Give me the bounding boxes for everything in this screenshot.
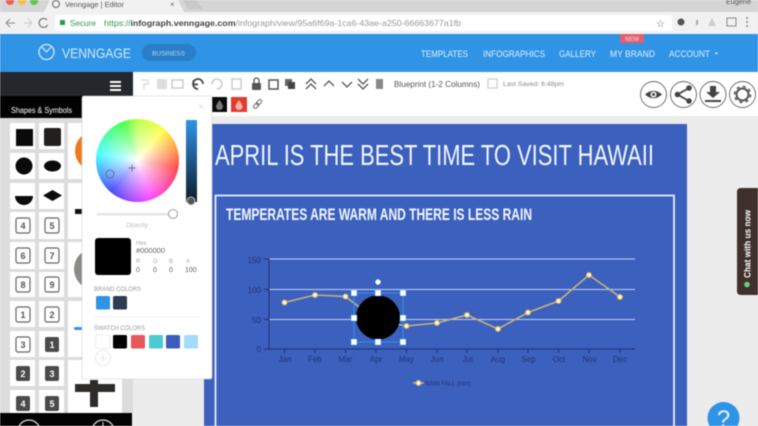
filled number icons: [16, 337, 59, 411]
browser address bar: [0, 12, 758, 34]
navigation: INFOGRAPHICS: [483, 49, 545, 60]
selected black circle: [351, 279, 406, 345]
axis labels: Aug: [491, 355, 505, 364]
number labels: 2: [20, 369, 26, 379]
navigation: ACCOUNT: [669, 49, 710, 60]
current colour and values: 0: [169, 267, 173, 274]
document name and save status: Blueprint (1-2 Columns): [394, 79, 480, 89]
current colour and values: 0: [153, 267, 157, 274]
chat tab: [737, 188, 758, 295]
left panel header: [0, 72, 133, 118]
panel: shapes and symbols: [0, 118, 133, 413]
axis labels: 0: [257, 345, 262, 354]
icon: settings gear: [730, 82, 756, 108]
current colour and values: #000000: [136, 246, 165, 255]
number labels: 8: [20, 280, 26, 290]
opacity slider: Opacity: [126, 222, 149, 229]
axis labels: Oct: [553, 355, 566, 364]
poster canvas: [204, 124, 687, 426]
number labels: 7: [49, 251, 55, 261]
current colour and values: 0: [136, 267, 140, 274]
axis labels: Mar: [339, 355, 353, 364]
axis labels: [248, 256, 627, 364]
document name and save status: Last Saved: 6:48pm: [503, 81, 564, 88]
swatch colours: SWATCH COLORS: [94, 326, 145, 332]
current colour and values: 100: [185, 267, 197, 274]
current colour and values: A: [186, 259, 190, 265]
left panel footer: [0, 413, 132, 426]
current colour and values: G: [153, 259, 158, 265]
white frame: [216, 196, 674, 426]
navigation: MY BRAND: [610, 49, 655, 60]
business badge: BUSINESS: [152, 50, 186, 58]
navigation: TEMPLATES: [421, 49, 468, 60]
axis labels: Apr: [370, 355, 383, 364]
rain fall series: [284, 275, 620, 329]
logo and brand: [39, 44, 131, 61]
editor toolbar: [133, 72, 758, 116]
subtitle: TEMPERATES ARE WARM AND THERE IS LESS RAIN: [226, 206, 532, 224]
browser address bar: ☆: [656, 19, 665, 30]
number labels: 1: [49, 340, 55, 350]
line chart: rain fall: [248, 256, 635, 388]
axis labels: May: [399, 355, 414, 364]
chart legend: [413, 381, 471, 388]
number labels: 9: [49, 280, 55, 290]
wheel markers: [106, 164, 136, 178]
number labels: 6: [20, 251, 26, 261]
chat tab: Chat with us now: [742, 209, 752, 278]
current colour and values: R: [136, 259, 141, 265]
colour buttons: [212, 97, 262, 112]
browser address bar: https://infograph.venngage.com /infograph/view/95a6f69a-1ca6-43ae-a250-66663677a1fb: [104, 18, 461, 28]
new badge: NEW: [625, 37, 639, 43]
business badge: [142, 44, 196, 61]
current colour and values: Hex: [136, 241, 147, 247]
browser tab bar: Venngage | Editor: [65, 0, 124, 9]
axis labels: 150: [248, 256, 262, 265]
new badge: [620, 34, 644, 43]
browser tab bar: ×: [170, 0, 175, 9]
axis labels: 100: [248, 286, 262, 295]
app header bar: [0, 34, 758, 72]
outlined number icons: [16, 218, 59, 352]
number labels: 3: [20, 340, 26, 350]
number labels: 2: [49, 310, 55, 320]
number labels: 1: [20, 310, 26, 320]
colour wheel: [96, 119, 180, 203]
data points: [282, 273, 622, 331]
large shape previews: [74, 131, 116, 407]
number labels: 5: [49, 399, 55, 409]
number labels: 5: [49, 221, 55, 231]
current colour and values: B: [169, 259, 173, 265]
axis labels: Jun: [431, 355, 443, 364]
axis labels: Dec: [613, 355, 627, 364]
browser address bar: Secure: [70, 18, 96, 28]
help button: [708, 402, 740, 426]
axis labels: Feb: [308, 355, 322, 364]
icon: share: [670, 82, 696, 108]
left panel header: Shapes & Symbols: [11, 106, 72, 115]
opacity slider: [97, 210, 178, 229]
document name and save status: [394, 79, 564, 89]
edit tool icons: [141, 78, 383, 90]
number labels: 4: [20, 399, 26, 409]
number labels: 4: [20, 221, 26, 231]
swatch colours: [94, 326, 198, 366]
current colour and values: [95, 238, 197, 275]
logo and brand: VENNGAGE: [62, 45, 131, 61]
brand colours: BRAND COLORS: [94, 287, 141, 293]
icon: preview eye: [640, 82, 666, 108]
browser tab bar: [0, 0, 758, 12]
navigation: GALLERY: [559, 49, 597, 60]
axis labels: Nov: [582, 355, 597, 364]
axis labels: Jan: [279, 355, 291, 364]
number labels: 3: [49, 369, 55, 379]
brand colours: [94, 287, 141, 310]
number labels: [20, 221, 55, 409]
chart legend: RAIN FALL (mm): [425, 382, 471, 388]
solid shape icons: [15, 128, 62, 205]
navigation: [421, 49, 718, 60]
icon: download: [700, 82, 726, 108]
colour picker popup: [82, 96, 212, 379]
axis labels: 50: [252, 316, 262, 325]
colour picker popup: ×: [198, 101, 204, 113]
axis labels: Jul: [462, 355, 473, 364]
shade slider: [186, 120, 197, 205]
axis labels: Sep: [521, 355, 536, 364]
